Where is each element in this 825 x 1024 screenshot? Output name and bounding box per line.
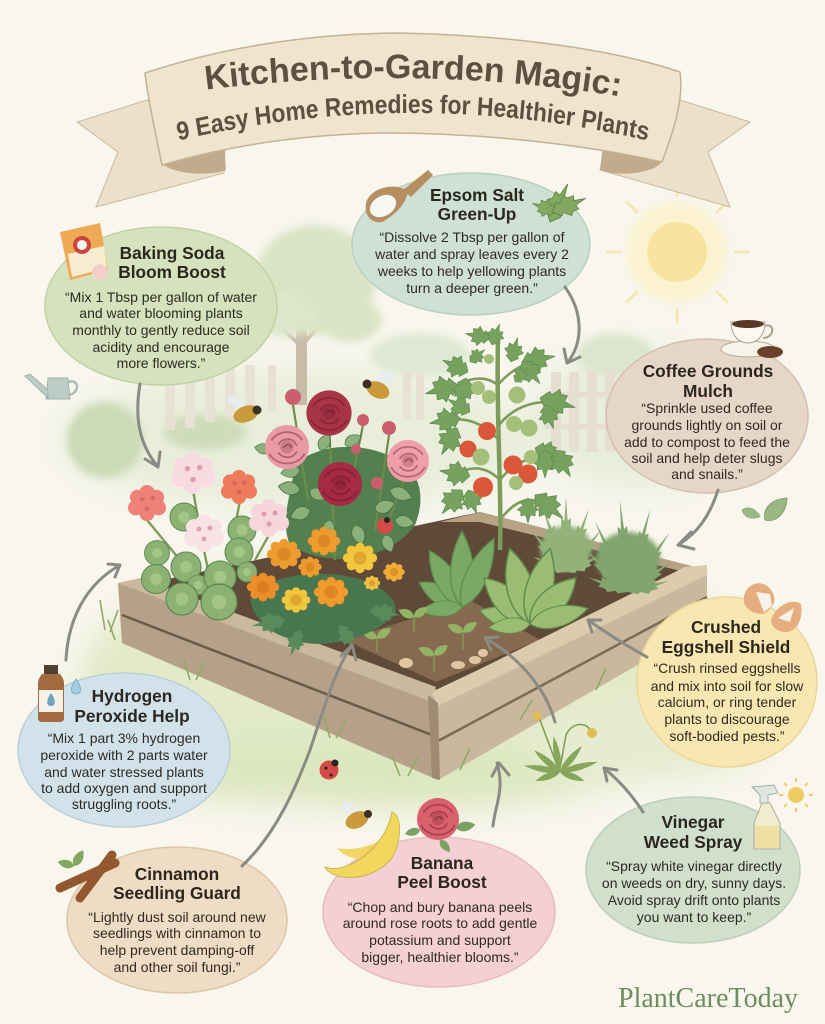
bubble: hydrogen peroxide	[18, 665, 230, 827]
rose bush	[254, 389, 429, 560]
bubble: crushed eggshell	[637, 583, 817, 767]
bubble: coffee grounds: “Sprinkle used coffee	[641, 400, 773, 416]
tomato plant	[422, 321, 581, 550]
bubble: banana peel	[323, 798, 555, 987]
bubble: coffee grounds: Mulch	[683, 381, 733, 401]
title text: Kitchen-to-Garden Magic:	[205, 54, 620, 97]
bubble: vinegar: you want to keep.”	[637, 909, 752, 925]
bubble: cinnamon	[57, 847, 287, 993]
ribbon curls	[160, 146, 226, 174]
bubble: banana peel: Peel Boost	[397, 872, 487, 892]
bubble: baking soda: monthly to gently reduce soil	[72, 322, 250, 338]
bubble: coffee grounds: and snails.”	[671, 466, 743, 482]
arrow: coffee	[678, 490, 718, 549]
bubble: cinnamon: Seedling Guard	[113, 883, 241, 903]
left face	[118, 583, 438, 780]
bubble: banana peel: around rose roots to add gentle	[343, 915, 538, 931]
bubble: cinnamon: “Lightly dust soil around new	[88, 909, 267, 925]
grass tufts	[100, 600, 606, 776]
arrow: eggshell	[588, 620, 647, 657]
bubble: crushed eggshell: soft-bodied pests.”	[669, 728, 785, 744]
corner post	[428, 695, 440, 780]
bubble: hydrogen peroxide: peroxide with 2 parts water	[40, 747, 208, 763]
bubble: crushed eggshell: calcium, or ring tender	[658, 694, 797, 710]
bubble: vinegar	[586, 778, 813, 943]
bubble: epsom salt: weeks to help yellowing plants	[377, 263, 566, 279]
bubble: crushed eggshell: Eggshell Shield	[662, 637, 790, 657]
bubble: coffee grounds: add to compost to feed the	[624, 434, 790, 450]
bubble: baking soda: acidity and encourage	[92, 339, 230, 355]
bubble: coffee grounds: grounds lightly on soil or	[632, 417, 783, 433]
bubble: coffee grounds	[606, 320, 808, 493]
bubble: baking soda: Bloom Boost	[118, 262, 226, 282]
bubble: crushed eggshell: plants to discourage	[664, 711, 790, 727]
bee right	[362, 369, 396, 402]
arrow: weed to soil	[485, 637, 555, 722]
geraniums	[128, 452, 289, 620]
icon: banana	[325, 812, 400, 878]
arrow: epsom	[564, 287, 580, 363]
icon: sprout	[57, 848, 87, 870]
background bushes	[67, 333, 653, 478]
bubble: baking soda: “Mix 1 Tbsp per gallon of water	[65, 289, 257, 305]
bubble: crushed eggshell: Crushed	[691, 617, 761, 637]
arrow: baking soda	[138, 384, 160, 467]
bubble: banana peel: “Chop and bury banana peels	[348, 899, 532, 915]
bubble: vinegar: on weeds on dry, sunny days.	[602, 875, 786, 891]
sun	[607, 182, 748, 322]
icon: herb sprig	[529, 179, 590, 227]
bubble: hydrogen peroxide: to add oxygen and support	[41, 780, 207, 796]
bubble: banana peel: potassium and support	[369, 932, 511, 948]
bee bottom	[340, 799, 372, 832]
ribbon tail left	[77, 100, 225, 207]
bubble: cinnamon: and other soil fungi.”	[114, 959, 241, 975]
title banner	[76, 32, 751, 208]
bubble: baking soda: more flowers.”	[117, 355, 206, 371]
bubble: banana peel: bigger, healthier blooms.”	[361, 949, 519, 965]
bubble: vinegar: Weed Spray	[644, 832, 743, 852]
soil	[140, 512, 695, 690]
icon: scoop	[366, 170, 433, 222]
bubble: epsom salt: “Dissolve 2 Tbsp per gallon of	[380, 229, 565, 245]
brand: PlantCareToday	[618, 983, 798, 1014]
raised bed	[118, 512, 707, 780]
bubble: epsom salt: Epsom Salt	[430, 185, 524, 205]
icon: rose	[404, 798, 476, 854]
bubble: baking soda: and water blooming plants	[79, 305, 243, 321]
bubble: vinegar: Avoid spray drift onto plants	[608, 892, 780, 908]
arrow: cinnamon	[242, 645, 356, 866]
bee left	[225, 393, 262, 426]
bubble: crushed eggshell: “Crush rinsed eggshells	[653, 660, 801, 676]
bubble: epsom salt: turn a deeper green.”	[406, 280, 538, 296]
lettuce	[414, 532, 590, 635]
pebbles	[399, 649, 488, 669]
bubble: hydrogen peroxide: struggling roots.”	[72, 796, 176, 812]
icon: small sun	[779, 778, 813, 812]
bubble: hydrogen peroxide: Peroxide Help	[74, 706, 190, 726]
bubble: vinegar: “Spray white vinegar directly	[606, 858, 782, 874]
marigolds	[247, 527, 405, 659]
icon: leaves	[740, 493, 792, 525]
arrow: hydrogen	[66, 564, 120, 660]
bubble: epsom salt: Green-Up	[438, 204, 516, 224]
bubble: vinegar: Vinegar	[661, 812, 725, 832]
icon: watering can	[25, 374, 77, 399]
right face	[432, 567, 707, 780]
icon: eggshells	[744, 583, 801, 632]
bubble: crushed eggshell: and mix into soil for slow	[651, 678, 804, 694]
bubble: hydrogen peroxide: and water stressed plants	[44, 764, 204, 780]
ribbon tail right	[600, 100, 750, 207]
bubble: epsom salt: water and spray leaves every 2	[374, 246, 569, 262]
icon: peroxide bottle	[38, 665, 80, 722]
bubble: banana peel: Banana	[411, 853, 474, 873]
background tree	[255, 225, 382, 405]
icon: spray bottle	[752, 785, 780, 849]
seedlings	[360, 604, 479, 672]
icon: baking soda box	[60, 223, 108, 280]
left rim	[118, 578, 436, 702]
weed	[524, 712, 598, 784]
arrow: banana	[492, 763, 509, 826]
bubble: cinnamon: seedlings with cinnamon to	[93, 925, 261, 941]
bubble: coffee grounds: soil and help deter slugs	[632, 450, 782, 466]
right rim	[432, 565, 707, 706]
back rim	[440, 512, 695, 572]
herbs	[526, 496, 676, 599]
ladybug	[320, 760, 338, 780]
icon: cinnamon sticks	[60, 855, 115, 898]
picket fence left	[165, 365, 424, 430]
bubble: cinnamon: Cinnamon	[135, 864, 219, 884]
bubble: cinnamon: help prevent damping-off	[100, 942, 254, 958]
subtitle text: 9 Easy Home Remedies for Healthier Plants	[176, 94, 648, 140]
arrow: vinegar	[604, 768, 643, 812]
bubble: hydrogen peroxide: “Mix 1 part 3% hydrogen	[48, 730, 200, 746]
bubble: coffee grounds: Coffee Grounds	[643, 361, 773, 381]
ladybug on plants	[377, 517, 393, 534]
picket fence right	[545, 370, 617, 452]
garden wash	[60, 350, 760, 810]
bubble: baking soda: Baking Soda	[120, 243, 225, 263]
bubble: epsom salt	[352, 170, 590, 315]
bubble: baking soda	[45, 223, 277, 385]
bubble: hydrogen peroxide: Hydrogen	[92, 686, 172, 706]
icon: coffee cup	[721, 320, 783, 358]
